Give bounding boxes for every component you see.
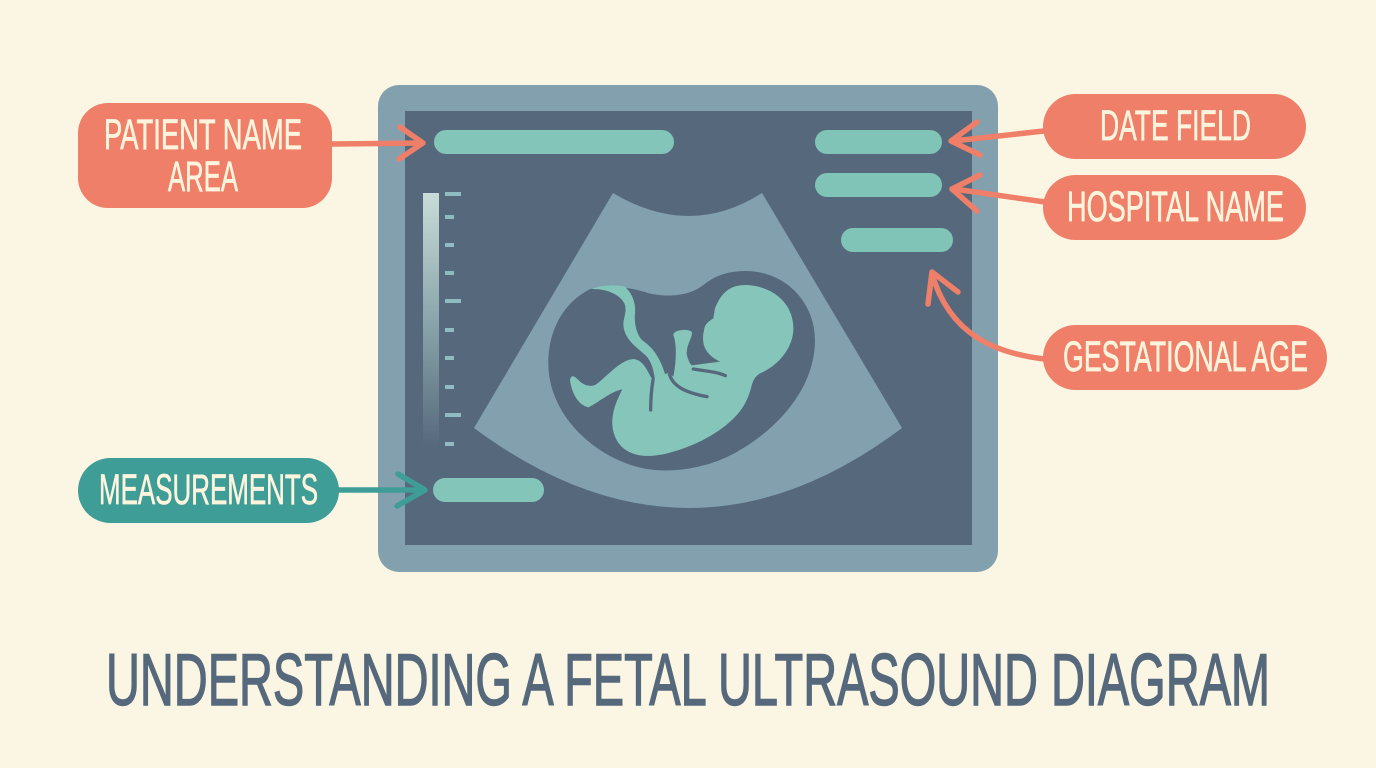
fetus silhouette: [570, 285, 793, 456]
gestational age bar: [841, 228, 953, 252]
label: measurements: [78, 458, 339, 523]
depth scale: [423, 192, 461, 447]
ultrasound monitor: [378, 85, 998, 572]
ultrasound sector: [474, 193, 902, 508]
label: patient name area: PATIENT NAME: [104, 111, 302, 159]
label: gestational age: [1043, 325, 1327, 390]
arrow: date field: [951, 122, 1044, 155]
arrow: measurements: [339, 474, 425, 506]
arrow: hospital name: [952, 175, 1045, 211]
fetus detail lines: [651, 369, 725, 410]
womb cavity: [548, 271, 815, 470]
arrow: patient name: [332, 127, 423, 159]
patient name bar: [434, 130, 674, 154]
arrow: gestational age: [928, 272, 1044, 359]
measurements bar: [433, 478, 544, 502]
monitor frame: [378, 85, 998, 572]
label: patient name area: AREA: [168, 153, 238, 201]
label: measurements: MEASUREMENTS: [99, 466, 318, 514]
womb and fetus: [548, 271, 815, 470]
label: date field: [1043, 94, 1306, 159]
label: date field: DATE FIELD: [1100, 102, 1251, 150]
date bar: [815, 130, 942, 154]
label: hospital name: [1043, 175, 1306, 240]
hospital name bar: [815, 173, 942, 197]
umbilical cord: [591, 285, 665, 380]
monitor screen: [405, 111, 972, 545]
label: patient name area: [78, 103, 332, 208]
